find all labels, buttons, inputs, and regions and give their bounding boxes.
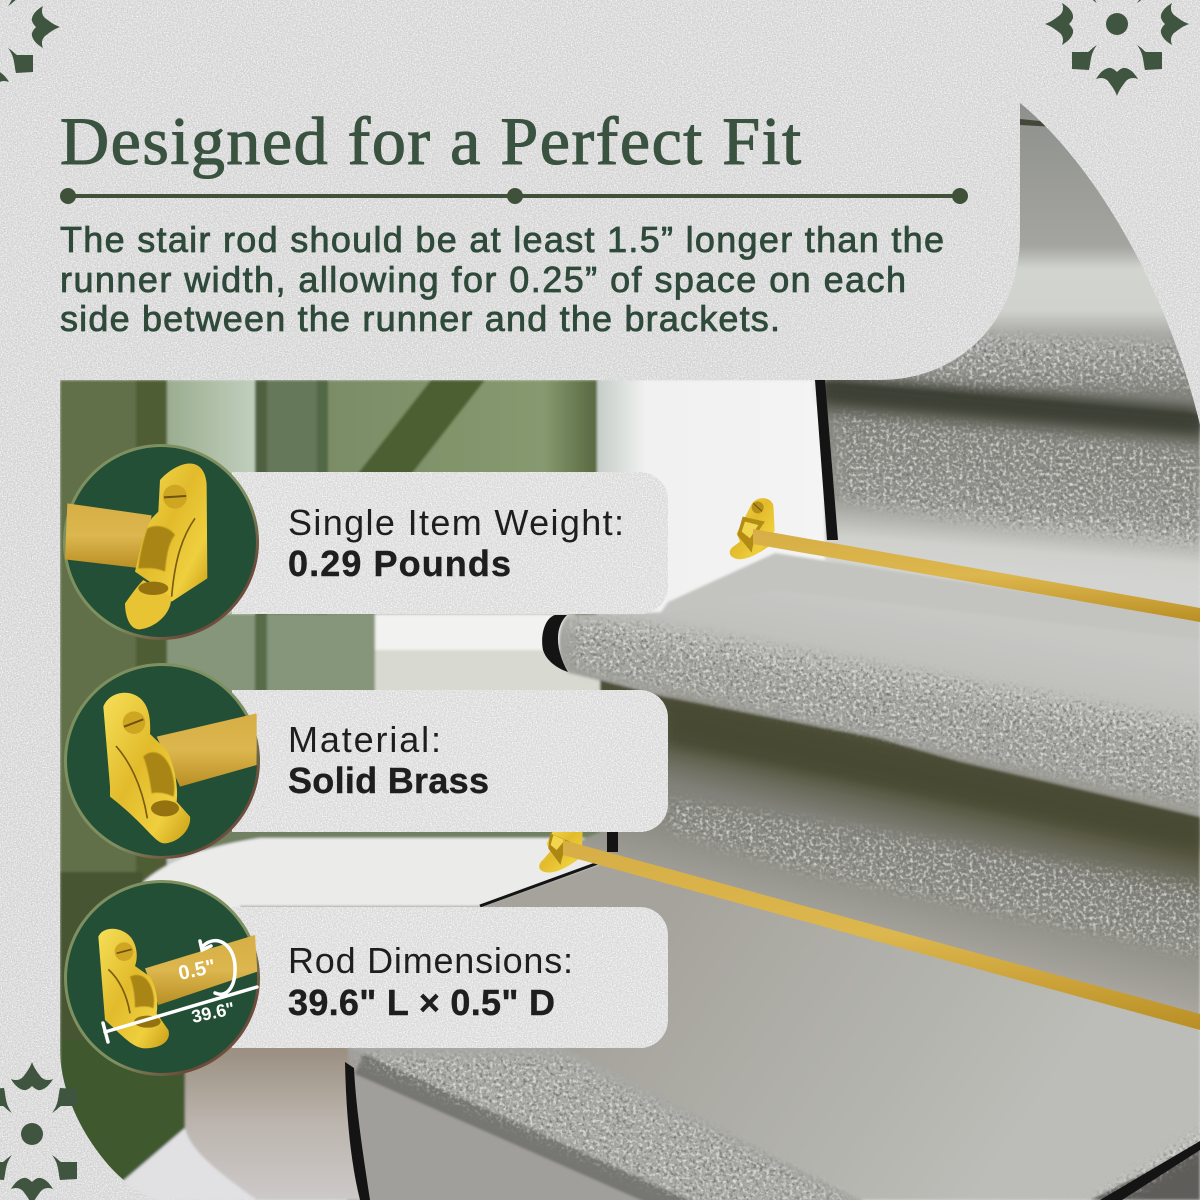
white wall and steps (597, 380, 837, 620)
weight label: Single Item Weight: (288, 502, 624, 543)
upper carpet tread (820, 100, 1200, 420)
stair rod upper with bracket (730, 498, 1200, 622)
white lower tread (120, 1128, 257, 1200)
material label: Material: (288, 719, 441, 760)
ornament: top right (1045, 0, 1189, 96)
description text: side between the runner and the brackets. (60, 298, 780, 339)
icon: bracket circle three with dimensions (64, 880, 260, 1076)
icon: bracket circle one (63, 444, 259, 640)
panels base fill (232, 460, 672, 1060)
upper carpet riser (824, 382, 1200, 608)
dimensions value: 39.6" L × 0.5" D (288, 982, 555, 1023)
dimensions label: Rod Dimensions: (288, 940, 573, 981)
black runner bindings (345, 119, 1200, 1200)
dimension lines (103, 941, 257, 1042)
description text: The stair rod should be at least 1.5” longer than the (60, 219, 944, 260)
carpet nose middle (559, 590, 1200, 817)
panel: weight (232, 472, 668, 614)
title divider (60, 188, 968, 204)
title: Designed for a Perfect Fit (60, 103, 801, 179)
lower flat tread (240, 860, 1200, 1200)
panel: material (232, 690, 668, 832)
dimension label length: 39.6" (190, 998, 236, 1027)
soft shadow accents (666, 376, 1200, 850)
ornament: bottom left (0, 1062, 77, 1200)
dimension label diameter: 0.5" (176, 956, 218, 985)
stair rod lower with bracket (539, 830, 1200, 1030)
description text (60, 219, 944, 339)
lower riser (563, 680, 1200, 1030)
carpet pile texture (340, 300, 1200, 1200)
icon: bracket circle two (64, 663, 260, 859)
pale tread (661, 552, 1200, 640)
description text: runner width, allowing for 0.25” of space on each (60, 259, 906, 300)
weight value: 0.29 Pounds (288, 543, 511, 584)
lower carpet side (346, 1167, 644, 1200)
ornament: top left (0, 0, 60, 99)
taupe riser (185, 1046, 368, 1200)
material value: Solid Brass (288, 760, 489, 801)
green wall panels (60, 380, 607, 900)
panel: dimensions (232, 907, 668, 1048)
green lower column (60, 1047, 187, 1181)
